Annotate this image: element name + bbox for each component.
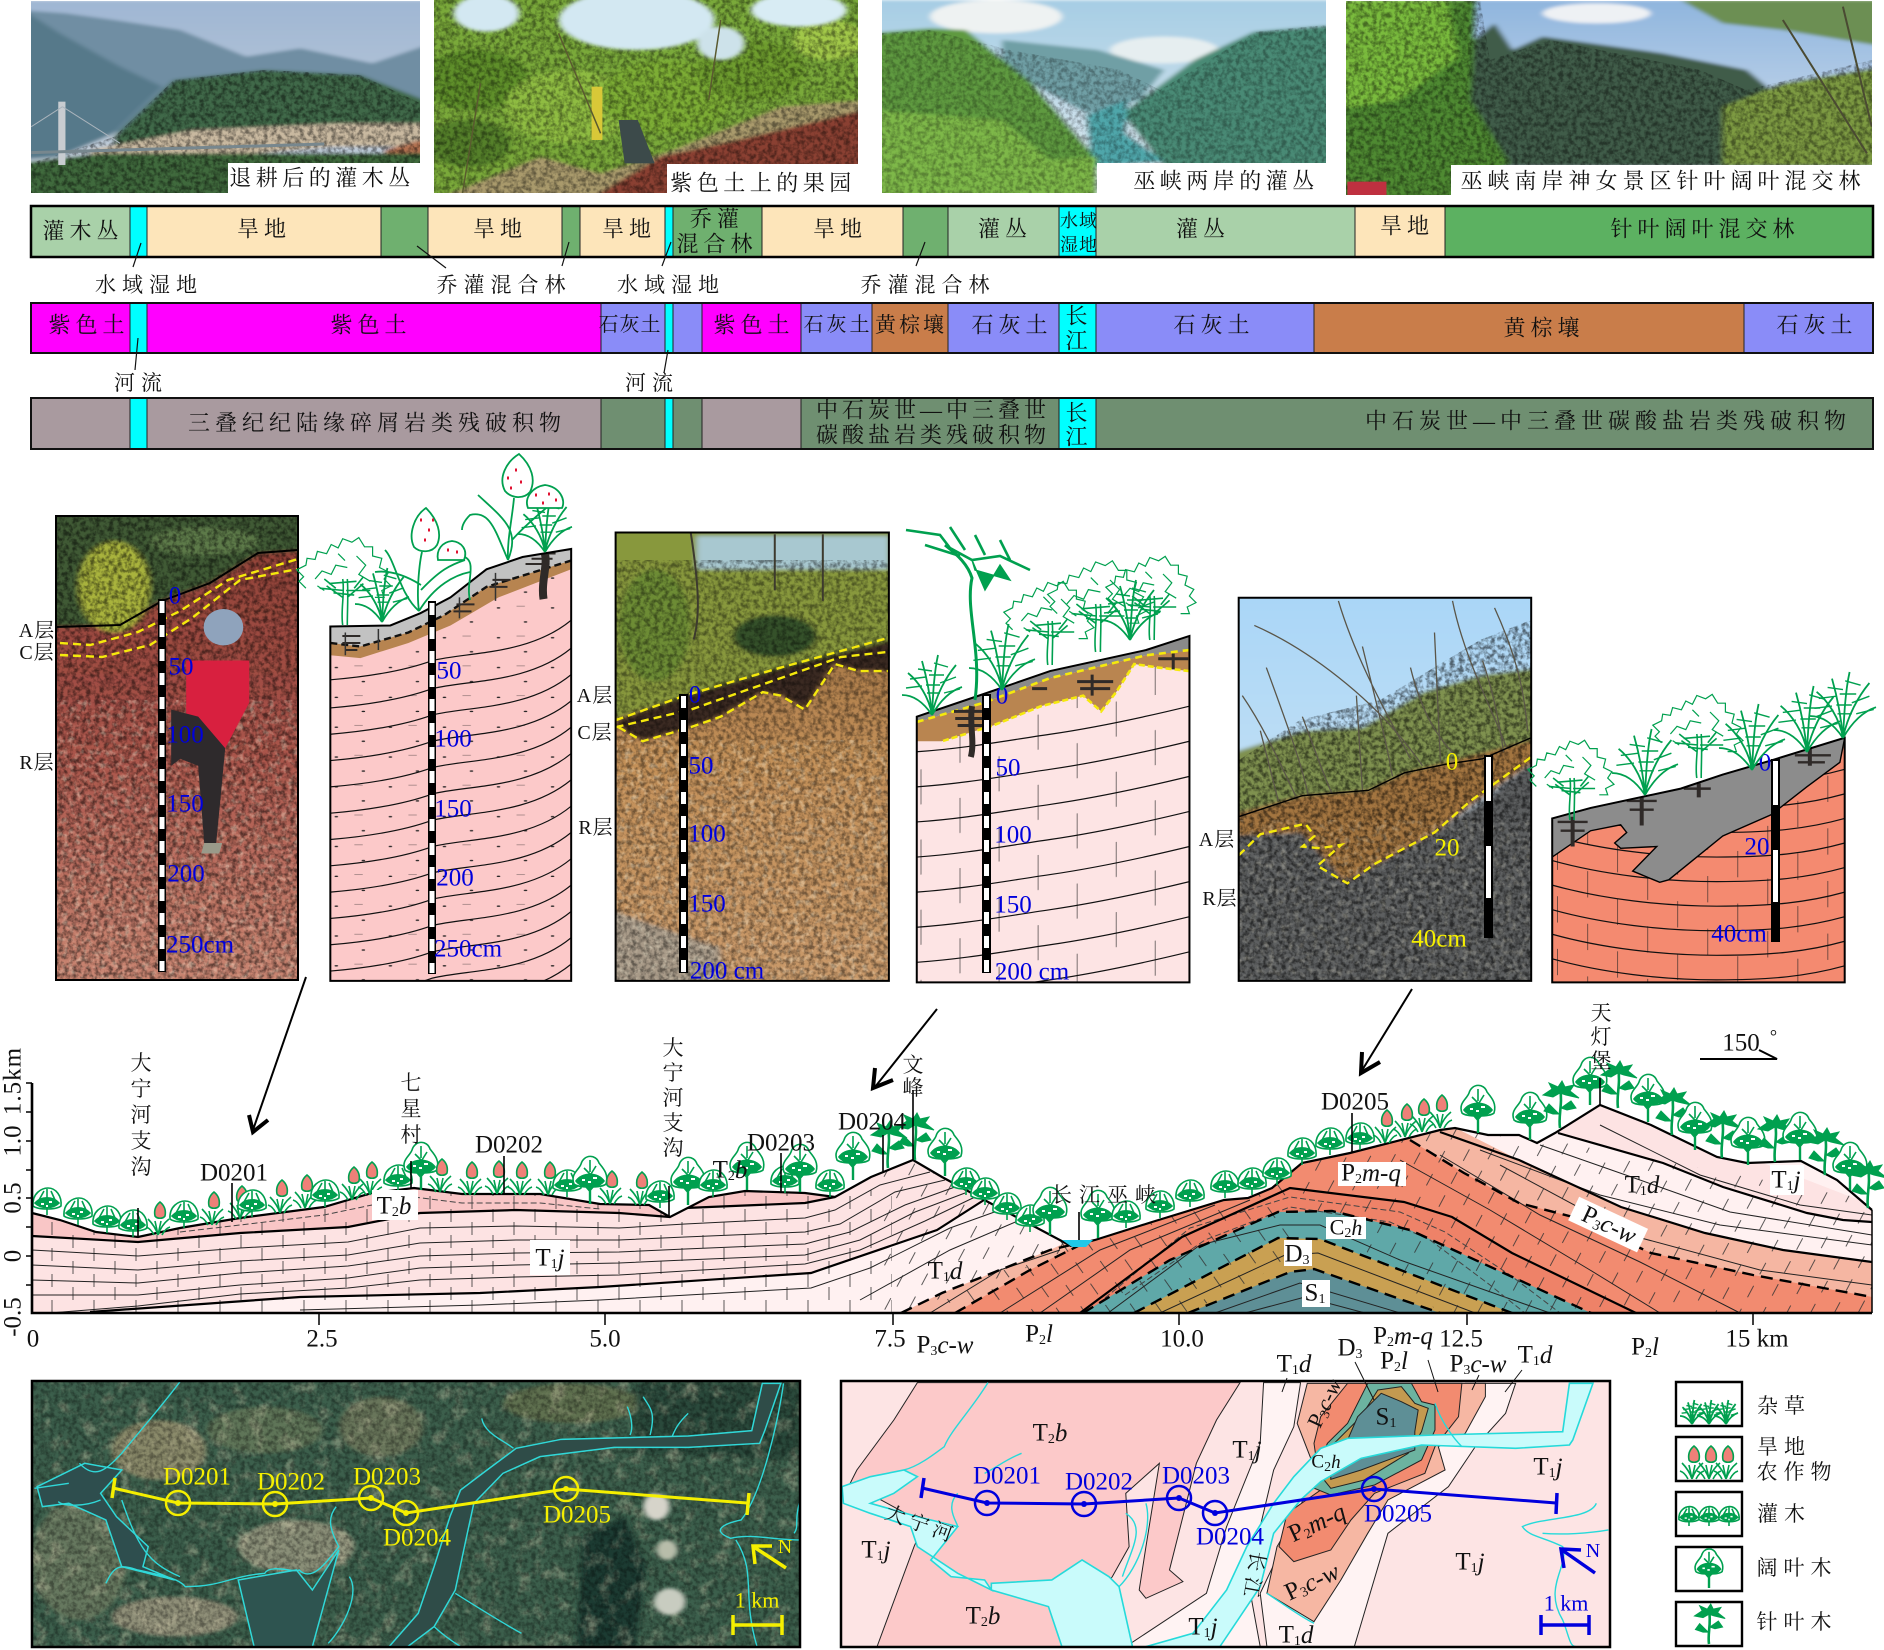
section axes: 0.5 xyxy=(0,1182,26,1214)
north arrow and scale on satellite map: N xyxy=(778,1536,792,1558)
stratum labels: 2 xyxy=(392,1204,399,1220)
vegetation above profile D0201 xyxy=(297,454,572,625)
stratum labels: d xyxy=(950,1258,963,1284)
place names and sampling points: 村 xyxy=(400,1123,422,1147)
soil strip callouts: 河流 xyxy=(625,371,679,395)
horizon labels profile 1: C层 xyxy=(19,641,55,664)
geological map labels: T xyxy=(1533,1454,1549,1480)
labels above the geological map: T xyxy=(1518,1342,1533,1368)
legend: broadleaf tree xyxy=(1676,1547,1838,1591)
geological map labels: 2 xyxy=(1048,1432,1055,1446)
stratum labels: d xyxy=(1647,1172,1660,1198)
labels above the geological map: d xyxy=(1299,1350,1312,1378)
geological map labels: 1 xyxy=(1204,1626,1211,1640)
soil strip: 石灰土 xyxy=(1776,312,1858,338)
stratum labels: c-w xyxy=(1596,1210,1641,1249)
place names and sampling points: 文 xyxy=(902,1053,924,1077)
soil profile diagram D0201: 250cm xyxy=(434,936,503,962)
soil strip: 石灰土 xyxy=(1173,312,1255,338)
survey line on geological map: D0204 xyxy=(1196,1524,1265,1550)
labels above the geological map: P xyxy=(1449,1350,1463,1378)
horizon labels profile 5: R层 xyxy=(1202,887,1238,910)
geological map labels: T xyxy=(966,1602,981,1630)
soil profile diagram D0201: 100 xyxy=(434,726,472,752)
horizon labels profile 5: A层 xyxy=(1199,828,1235,851)
stratum labels: T xyxy=(1771,1166,1787,1194)
stratum labels: T xyxy=(713,1156,728,1184)
geological map labels: j xyxy=(881,1536,891,1564)
legend: grass: 杂草 xyxy=(1757,1394,1811,1418)
parent material strip: 碳酸盐岩类残破积物 xyxy=(816,422,1050,448)
geological map labels: 2 xyxy=(1302,1525,1315,1542)
place names and sampling points: 七 xyxy=(400,1071,422,1095)
soil strip: 石灰土 xyxy=(971,312,1053,338)
soil profile photo D0201: 0 xyxy=(169,582,181,610)
soil profile photo D0203: 150 xyxy=(688,890,726,918)
stratum labels: 3 xyxy=(930,1344,937,1358)
geological map labels: 1 xyxy=(1471,1560,1478,1576)
stratum labels: 1 xyxy=(1787,1178,1794,1194)
soil strip: 黄棕壤 xyxy=(875,313,947,337)
soil strip callouts: 河流 xyxy=(114,371,168,395)
labels above the geological map: D xyxy=(1337,1334,1356,1362)
soil strip: 紫色土 xyxy=(330,312,412,338)
land-use strip: 湿地 xyxy=(1060,235,1098,255)
geological map labels: m-q xyxy=(1303,1498,1350,1539)
soil profile diagram D0203: 0 xyxy=(996,682,1008,710)
section axes xyxy=(0,1047,1872,1352)
soil profile photo D0201: 50 xyxy=(168,654,194,680)
place names and sampling points: D0205 xyxy=(1321,1088,1389,1116)
stratum labels: P xyxy=(1373,1322,1387,1350)
legend: shrub: 灌木 xyxy=(1757,1502,1811,1526)
section layers xyxy=(32,1100,1872,1313)
section axes: 1.0 xyxy=(0,1125,26,1157)
soil profile diagram D0201: 150 xyxy=(434,796,472,822)
photo: mixed forest in Goddess scenic area xyxy=(1332,0,1884,200)
geological map labels: 3 xyxy=(1298,1584,1311,1600)
land-use strip: 灌木丛 xyxy=(42,218,124,244)
photo: Wu Gorge shrubland: 巫峡两岸的灌丛 xyxy=(1133,168,1319,194)
stratum labels: j xyxy=(1791,1166,1801,1194)
land-use callouts: 乔灌混合林 xyxy=(436,273,572,297)
geological map labels: h xyxy=(1331,1452,1341,1472)
section axes: 10.0 xyxy=(1160,1326,1204,1352)
soil profile diagram D0201 xyxy=(330,549,571,1024)
geological map labels: T xyxy=(1455,1548,1471,1576)
land-use strip: 旱地 xyxy=(1380,214,1434,238)
photo: orchard on purple soil xyxy=(420,0,865,200)
horizon labels profile 5 xyxy=(1199,828,1238,910)
land-use strip: 旱地 xyxy=(237,216,291,242)
north arrow and scale on geological map xyxy=(1541,1540,1600,1635)
survey line on geological map: D0203 xyxy=(1162,1462,1230,1490)
soil profile photo D0201: 100 xyxy=(166,722,204,748)
north arrow and scale on geological map: N xyxy=(1586,1540,1600,1562)
labels above the geological map: T xyxy=(1277,1350,1292,1378)
horizon labels profile 1 xyxy=(19,619,55,774)
labels above the geological map: 3 xyxy=(1463,1362,1470,1378)
survey line on satellite map xyxy=(112,1464,749,1552)
north arrow and scale on satellite map: 1 km xyxy=(735,1588,779,1612)
horizon labels profile 3: C层 xyxy=(577,721,613,744)
legend: dryland crops xyxy=(1676,1435,1838,1484)
geological map labels: j xyxy=(1475,1548,1485,1576)
place names and sampling points: 峰 xyxy=(902,1076,924,1100)
soil strip callouts xyxy=(114,338,679,395)
land-use strip: 灌丛 xyxy=(1176,216,1230,242)
legend: conifer xyxy=(1676,1602,1838,1646)
vegetation along the section xyxy=(33,1057,1884,1238)
soil profile photo D0205: 40cm xyxy=(1411,926,1467,952)
survey line on geological map xyxy=(921,1462,1557,1550)
geological map labels: 长江 xyxy=(1238,1549,1269,1605)
stratum labels: P xyxy=(1025,1320,1039,1348)
geological map labels: j xyxy=(1553,1454,1563,1480)
section axes: 1.5km xyxy=(0,1047,26,1115)
photo: orchard on purple soil: 紫色土上的果园 xyxy=(670,170,856,196)
geological map labels: b xyxy=(1055,1420,1067,1446)
geological map labels: c-w xyxy=(1299,1558,1344,1597)
stratum labels: 2 xyxy=(1387,1334,1394,1350)
place names and sampling points: D0203 xyxy=(747,1130,815,1156)
place names and sampling points: D0201 xyxy=(200,1160,268,1186)
survey line on geological map: D0202 xyxy=(1065,1468,1133,1496)
soil profile diagram D0203: 50 xyxy=(996,754,1020,782)
arrow: profile D0201 to section xyxy=(249,977,306,1132)
land-use callouts: 水域湿地 xyxy=(617,273,725,297)
parent material strip: 长 xyxy=(1065,400,1093,426)
survey line on geological map: D0201 xyxy=(973,1462,1041,1490)
stratum labels: T xyxy=(377,1192,392,1220)
labels above the geological map: 1 xyxy=(1533,1354,1540,1368)
geological map labels: j xyxy=(1208,1614,1218,1640)
geological map labels: P xyxy=(1280,1576,1304,1606)
soil profile photo D0201 xyxy=(55,515,299,981)
place names and sampling points: 天 xyxy=(1590,1001,1612,1025)
land-use strip: 旱地 xyxy=(602,216,656,242)
vegetation above profile D0205 xyxy=(1528,672,1876,820)
stratum labels: P xyxy=(1341,1160,1355,1186)
stratum labels: T xyxy=(928,1258,943,1284)
place names and sampling points: 宁 xyxy=(662,1061,684,1085)
legend: dryland crops: 旱地 xyxy=(1757,1435,1811,1459)
place names and sampling points: D0204 xyxy=(838,1108,907,1136)
horizon labels profile 1: A层 xyxy=(19,619,55,642)
arrow: profile D0203 to section xyxy=(873,1009,937,1088)
section axes: 5.0 xyxy=(589,1326,621,1352)
stratum labels: 2 xyxy=(1355,1172,1362,1186)
soil strip: 石灰土 xyxy=(598,313,662,336)
geological map labels: T xyxy=(861,1536,877,1564)
legend: shrub xyxy=(1676,1492,1811,1536)
stratum labels: 3 xyxy=(1590,1217,1603,1234)
photo: shrubland after farmland retirement: 退耕后的灌木丛 xyxy=(229,166,415,190)
north arrow and scale on geological map: 1 km xyxy=(1544,1590,1588,1616)
geological map xyxy=(841,1374,1610,1648)
place names and sampling points: 大 xyxy=(130,1051,152,1075)
geological map labels: 3 xyxy=(1317,1408,1334,1421)
soil profile photo D0203: 200 cm xyxy=(690,958,765,984)
soil profile diagram D0201: 50 xyxy=(436,658,462,684)
stratum labels: h xyxy=(1351,1214,1362,1240)
horizon labels profile 3: A层 xyxy=(577,684,613,707)
place names and sampling points: 大 xyxy=(662,1036,684,1060)
geological map labels: P xyxy=(1284,1518,1308,1548)
soil profile photo D0205: 20 xyxy=(1434,834,1460,862)
legend: dryland crops: 农作物 xyxy=(1756,1460,1838,1484)
section axes: 0 xyxy=(0,1250,26,1262)
geological map labels: T xyxy=(1188,1614,1204,1640)
legend: grass xyxy=(1676,1382,1811,1426)
place names and sampling points: 支 xyxy=(662,1111,684,1135)
stratum labels: P xyxy=(1631,1334,1645,1360)
place names and sampling points: D0202 xyxy=(475,1132,543,1158)
stratum labels: l xyxy=(1652,1334,1659,1360)
geological map labels: b xyxy=(988,1602,1000,1630)
place names and sampling points: 灯 xyxy=(1590,1025,1612,1049)
land-use callouts: 乔灌混合林 xyxy=(860,273,996,297)
photo: Wu Gorge shrubland xyxy=(870,0,1338,200)
place names and sampling points: 河 xyxy=(130,1103,152,1127)
stratum labels: 2 xyxy=(1039,1332,1046,1348)
soil profile diagram D0205: 20 xyxy=(1744,834,1770,860)
soil profile diagram D0205 xyxy=(1552,738,1845,982)
geological map labels: S xyxy=(1376,1404,1389,1430)
stratum labels: D xyxy=(1284,1240,1303,1268)
stratum labels: P xyxy=(1577,1201,1601,1231)
survey line on geological map: D0205 xyxy=(1364,1500,1432,1528)
geological map labels: 1 xyxy=(877,1548,884,1564)
land-use strip: 水域 xyxy=(1060,211,1098,231)
geological map labels: P xyxy=(1302,1410,1330,1431)
soil profile diagram D0205: 0 xyxy=(1759,750,1771,776)
land-use strip: 混合林 xyxy=(676,232,758,256)
place names and sampling points: ° xyxy=(1770,1026,1778,1046)
labels above the geological map: c-w xyxy=(1470,1350,1507,1378)
photo: shrubland after farmland retirement xyxy=(31,1,420,193)
stratum labels: b xyxy=(399,1192,411,1220)
place names and sampling points: 宁 xyxy=(130,1077,152,1101)
stratum labels: 1 xyxy=(943,1270,950,1284)
horizon labels profile 3: R层 xyxy=(578,816,614,839)
soil profile diagram D0203: 150 xyxy=(994,892,1032,918)
labels above the geological map: 2 xyxy=(1394,1360,1401,1374)
parent material strip xyxy=(31,398,1873,450)
stratum labels: 2 xyxy=(1344,1226,1351,1240)
soil profile photo D0205 xyxy=(1238,596,1532,982)
section axes: -0.5 xyxy=(0,1297,26,1337)
soil profile photo D0203 xyxy=(614,532,890,982)
parent material strip: 三叠纪纪陆缘碎屑岩类残破积物 xyxy=(188,410,566,436)
stratum labels: 3 xyxy=(1303,1252,1310,1268)
survey line on satellite map: D0201 xyxy=(163,1464,231,1490)
place names and sampling points xyxy=(130,1001,1778,1240)
stratum labels: l xyxy=(1046,1320,1053,1348)
soil profile diagram D0203: 200 cm xyxy=(995,958,1070,986)
section axes: 0 xyxy=(27,1326,39,1352)
soil profile diagram D0205: 40cm xyxy=(1711,920,1767,948)
geological map labels: j xyxy=(1252,1436,1262,1464)
place names and sampling points: 沟 xyxy=(662,1136,684,1160)
place names and sampling points: 星 xyxy=(400,1097,422,1121)
parent material strip: 中石炭世—中三叠世 xyxy=(816,398,1050,422)
survey line on satellite map: D0204 xyxy=(383,1524,452,1552)
horizon labels profile 1: R层 xyxy=(19,751,55,774)
survey line on satellite map: D0202 xyxy=(257,1468,325,1496)
geological map labels: T xyxy=(1279,1622,1294,1648)
land-use callouts xyxy=(95,242,996,297)
soil strip xyxy=(31,303,1873,354)
soil profile diagram D0201: 200 xyxy=(436,864,474,892)
place names and sampling points: 河 xyxy=(662,1086,684,1110)
place names and sampling points: 支 xyxy=(130,1129,152,1153)
geological map labels: d xyxy=(1301,1622,1314,1648)
land-use strip: 灌丛 xyxy=(978,216,1032,242)
land-use strip: 旱地 xyxy=(473,216,527,242)
place names and sampling points: 150 xyxy=(1722,1030,1760,1056)
soil strip: 长 xyxy=(1065,304,1093,328)
soil profile photo D0203: 50 xyxy=(688,752,714,780)
section axes: 12.5 xyxy=(1439,1326,1483,1352)
soil profile photo D0201: 150 xyxy=(166,790,204,818)
legend: conifer: 针叶木 xyxy=(1756,1610,1838,1634)
soil strip: 黄棕壤 xyxy=(1503,316,1585,340)
photo: mixed forest in Goddess scenic area: 巫峡南岸神女景区针叶阔叶混交林 xyxy=(1460,168,1866,194)
labels above the geological map: l xyxy=(1401,1348,1408,1374)
geological map labels: 2 xyxy=(1324,1460,1331,1474)
survey line on satellite map: D0205 xyxy=(543,1502,611,1528)
stratum labels: b xyxy=(735,1156,747,1184)
geological map labels: T xyxy=(1033,1420,1048,1446)
place names and sampling points: 堡 xyxy=(1590,1049,1612,1073)
labels above the geological map: P xyxy=(1380,1348,1394,1374)
land-use strip: 旱地 xyxy=(813,216,867,242)
labels above the geological map: d xyxy=(1540,1342,1553,1368)
soil profile photo D0205: 0 xyxy=(1446,748,1458,776)
land-use callouts: 水域湿地 xyxy=(95,273,203,297)
land-use strip: 乔灌 xyxy=(690,206,744,232)
stratum labels: 2 xyxy=(1645,1346,1652,1360)
satellite map xyxy=(32,1381,800,1647)
geological map labels xyxy=(861,1374,1563,1648)
stratum labels: c-w xyxy=(937,1332,974,1358)
survey line on satellite map: D0203 xyxy=(353,1464,421,1490)
geological map labels: c-w xyxy=(1310,1374,1346,1414)
labels above the geological map xyxy=(1277,1334,1553,1400)
stratum labels: 2 xyxy=(728,1168,735,1184)
soil profile diagram D0203: 100 xyxy=(994,822,1032,848)
land-use strip xyxy=(31,206,1873,257)
Yangtze water xyxy=(1062,1240,1093,1247)
parent material strip: 江 xyxy=(1065,424,1093,450)
stratum labels: m-q xyxy=(1394,1322,1433,1350)
stratum labels xyxy=(372,1156,1804,1360)
stratum labels: 1 xyxy=(1318,1292,1325,1306)
soil strip: 紫色土 xyxy=(48,312,130,338)
soil profile diagram D0203 xyxy=(916,634,1190,984)
terrain surface xyxy=(32,1105,1872,1246)
geological map labels: T xyxy=(1232,1436,1248,1464)
section axes: 2.5 xyxy=(306,1326,338,1352)
stratum labels: T xyxy=(535,1244,551,1272)
stratum labels: m-q xyxy=(1362,1160,1401,1186)
legend: broadleaf tree: 阔叶木 xyxy=(1756,1556,1838,1580)
geological map labels: 大宁河 xyxy=(882,1501,960,1548)
soil strip: 石灰土 xyxy=(804,313,872,336)
soil profile photo D0201: 250cm xyxy=(166,932,235,958)
labels above the geological map: 3 xyxy=(1356,1346,1363,1362)
vegetation above profile D0203 xyxy=(902,527,1196,715)
arrow: profile D0205 to section xyxy=(1361,989,1412,1073)
geological map labels: C xyxy=(1311,1452,1324,1472)
geological map labels: 1 xyxy=(1389,1416,1396,1430)
place names and sampling points: 沟 xyxy=(130,1155,152,1179)
section axes: 15 km xyxy=(1725,1326,1789,1352)
soil strip: 江 xyxy=(1065,328,1093,354)
geological map labels: 1 xyxy=(1294,1634,1301,1648)
land-use strip: 针叶阔叶混交林 xyxy=(1610,216,1800,242)
soil profile photo D0201: 200 xyxy=(167,860,205,888)
horizon labels profile 3 xyxy=(577,684,614,839)
legend xyxy=(1676,1382,1838,1646)
north arrow and scale on satellite map xyxy=(733,1536,792,1635)
place names and sampling points: 长江巫峡 xyxy=(1051,1183,1163,1207)
soil profile photo D0203: 0 xyxy=(689,682,701,708)
stratum labels: 1 xyxy=(1640,1184,1647,1198)
labels above the geological map: 1 xyxy=(1292,1362,1299,1378)
stratum labels: j xyxy=(555,1244,565,1272)
geological map labels: 1 xyxy=(1549,1466,1556,1480)
stratum labels: T xyxy=(1625,1172,1640,1198)
stratum labels: P xyxy=(916,1332,930,1358)
stratum labels: S xyxy=(1305,1280,1318,1306)
geological cross-section xyxy=(0,1001,1884,1360)
stratum labels: C xyxy=(1330,1214,1344,1240)
section axes: 7.5 xyxy=(874,1326,906,1352)
soil strip: 紫色土 xyxy=(713,312,795,338)
soil profile photo D0203: 100 xyxy=(688,820,726,848)
geological map labels: 2 xyxy=(981,1614,988,1630)
parent material strip: 中石炭世—中三叠世碳酸盐岩类残破积物 xyxy=(1365,408,1851,434)
geological map labels: 1 xyxy=(1248,1448,1255,1464)
stratum labels: 1 xyxy=(551,1256,558,1272)
